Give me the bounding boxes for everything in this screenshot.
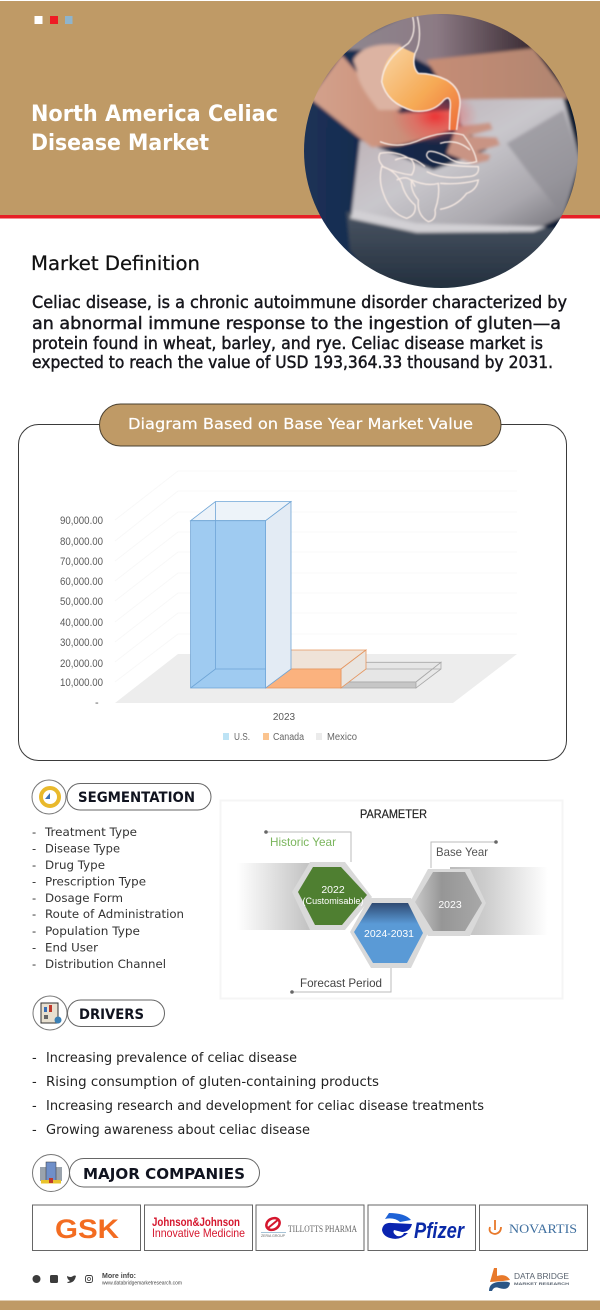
more info text: [102, 1271, 182, 1286]
logo: data bridge: MARKET RESEARCH: [514, 1281, 569, 1286]
axis labels: 80,000.00: [60, 536, 103, 548]
segmentation list: Population Type: [45, 924, 140, 938]
mexico bar: [341, 662, 441, 688]
logo: Tillotts Pharma: TILLOTTS PHARMA: [288, 1224, 357, 1234]
segmentation list: [32, 825, 184, 971]
segmentation list: End User: [45, 940, 98, 954]
hexagon: historic year: [298, 867, 367, 925]
axis labels: -: [95, 697, 99, 709]
logo: GSK: GSK: [55, 1214, 120, 1244]
legend: U.S.: [234, 732, 250, 743]
axis labels: 90,000.00: [60, 515, 103, 527]
callout: forecast period: Forecast Period: [300, 976, 382, 990]
heading pill: drivers: DRIVERS: [79, 1007, 144, 1023]
drivers list: Increasing prevalence of celiac disease: [46, 1051, 297, 1066]
hexagon: base year: 2023: [438, 899, 462, 911]
category label: 2023: [273, 712, 296, 723]
segmentation list: Treatment Type: [44, 825, 137, 839]
hexagon: historic year: (Customisable): [302, 896, 364, 906]
photo: abdominal pain with digestive system overlay: [300, 10, 587, 297]
segmentation list: -: [32, 891, 36, 905]
logo: GSK: [32, 1205, 140, 1250]
drivers list: [32, 1051, 484, 1138]
heading pill: diagram: Diagram Based on Base Year Market Value: [128, 415, 473, 433]
legend: Canada: [273, 732, 304, 743]
heading pill: major companies: MAJOR COMPANIES: [83, 1165, 245, 1183]
axis labels: 50,000.00: [60, 596, 103, 608]
header band: [0, 1, 600, 218]
drivers list: Increasing research and development for celiac disease treatments: [46, 1099, 484, 1114]
logo: Johnson & Johnson: Johnson&Johnson: [152, 1215, 240, 1229]
segmentation list: -: [32, 940, 36, 954]
more info text: More info:: [102, 1271, 136, 1280]
hexagon: base year: [415, 872, 482, 931]
icon: segmentation: [32, 780, 66, 814]
logo: Johnson & Johnson: Innovative Medicine: [152, 1226, 245, 1240]
segmentation list: -: [32, 858, 36, 872]
logo: Novartis: NOVARTIS: [509, 1222, 577, 1236]
axis labels: 70,000.00: [60, 556, 103, 568]
market definition paragraph: Celiac disease, is a chronic autoimmune disorder characterized by: [32, 293, 567, 312]
callout: historic year: [264, 830, 351, 862]
legend: Mexico: [327, 732, 357, 743]
bar chart: [60, 471, 517, 743]
hexagon: forecast period: 2024-2031: [364, 928, 414, 940]
heading pill: drivers: [68, 1000, 164, 1026]
axis labels: 40,000.00: [60, 617, 103, 629]
footer band: [0, 1300, 600, 1310]
segmentation list: Drug Type: [45, 858, 105, 872]
panel: diagram card: [18, 404, 566, 760]
logo: Pfizer: Pfizer: [414, 1218, 465, 1243]
parameter heading: PARAMETER: [360, 807, 427, 821]
drivers list: -: [32, 1123, 37, 1138]
canada bar: [266, 650, 366, 688]
segmentation list: -: [32, 924, 36, 938]
segmentation list: Disease Type: [45, 842, 120, 856]
logo: Tillotts Pharma: ZERIA GROUP: [261, 1234, 286, 1238]
panel: parameter: [220, 800, 562, 998]
market definition paragraph: expected to reach the value of USD 193,364.33 thousand by 2031.: [32, 353, 553, 372]
segmentation list: -: [32, 874, 36, 888]
drivers list: Rising consumption of gluten-containing products: [46, 1075, 379, 1090]
icon: drivers: [33, 996, 67, 1030]
title: [31, 102, 278, 156]
legend: [223, 732, 357, 743]
market definition paragraph: [32, 293, 567, 372]
decorative squares: [34, 16, 72, 24]
callout: forecast period: [290, 968, 391, 994]
logo: data bridge: DATA BRIDGE: [514, 1271, 569, 1281]
hexagon: historic year: 2022: [321, 884, 345, 896]
segmentation list: Prescription Type: [45, 874, 146, 888]
heading pill: diagram: [100, 404, 501, 446]
logo: Johnson & Johnson: [144, 1205, 252, 1250]
heading: market definition: Market Definition: [31, 252, 200, 275]
segmentation list: -: [32, 842, 36, 856]
market definition paragraph: an abnormal immune response to the ingestion of gluten—a: [32, 314, 561, 333]
drivers list: -: [32, 1075, 37, 1090]
market definition paragraph: protein found in wheat, barley, and rye. Celiac disease market is: [32, 334, 543, 353]
drivers list: -: [32, 1099, 37, 1114]
footer social icons: [32, 1275, 92, 1283]
axis labels: 30,000.00: [60, 637, 103, 649]
title: North America Celiac: [31, 102, 278, 127]
logo: Pfizer: [368, 1205, 476, 1250]
axis labels: 60,000.00: [60, 576, 103, 588]
title: Disease Market: [31, 131, 209, 156]
hexagon: forecast period: [354, 903, 423, 963]
drivers list: -: [32, 1051, 37, 1066]
u.s. bar: [191, 502, 291, 688]
segmentation list: -: [32, 825, 36, 839]
segmentation list: -: [32, 907, 36, 921]
axis labels: 20,000.00: [60, 658, 103, 670]
segmentation list: Distribution Channel: [45, 957, 166, 971]
callout: historic year: Historic Year: [270, 835, 336, 849]
heading pill: segmentation: [67, 784, 211, 810]
callout: base year: [431, 840, 498, 868]
axis labels: 10,000.00: [60, 677, 103, 689]
heading pill: segmentation: SEGMENTATION: [78, 790, 195, 806]
segmentation list: -: [32, 957, 36, 971]
callout: base year: Base Year: [436, 845, 488, 859]
logo: data bridge: [489, 1268, 569, 1291]
drivers list: Growing awareness about celiac disease: [46, 1123, 310, 1138]
icon: major companies: [32, 1154, 70, 1192]
logo: Novartis: [480, 1205, 588, 1250]
axis labels: [60, 515, 103, 709]
segmentation list: Dosage Form: [45, 891, 123, 905]
segmentation list: Route of Administration: [45, 907, 184, 921]
heading pill: major companies: [70, 1158, 260, 1187]
logo: Tillotts Pharma: [256, 1205, 364, 1250]
more info text: www.databridgemarketresearch.com: [102, 1280, 182, 1286]
